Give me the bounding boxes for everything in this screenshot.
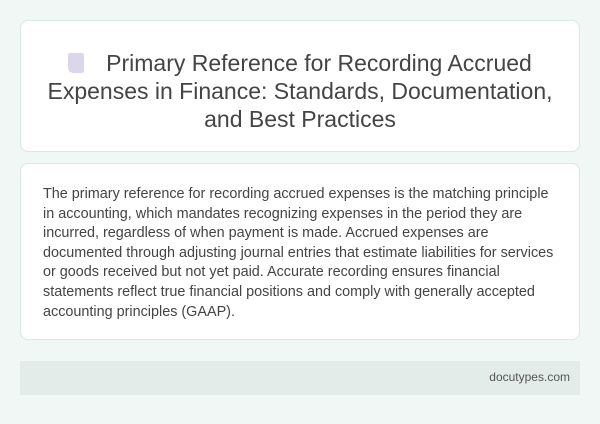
paragraph: in accounting, which mandates recognizing expenses in the period they are <box>43 206 522 222</box>
footer bar <box>20 361 580 395</box>
header panel <box>20 20 580 152</box>
icon: receipt <box>68 53 84 73</box>
paragraph: documented through adjusting journal entries that estimate liabilities for services <box>43 245 553 261</box>
body text panel <box>20 163 580 340</box>
footer text: docutypes.com <box>489 370 570 384</box>
paragraph: accounting principles (GAAP). <box>43 304 235 320</box>
title: Primary Reference for Recording Accrued Expenses in Finance: Standards, Documentation, and Best Practices <box>47 50 552 132</box>
paragraph: The primary reference for recording accrued expenses is the matching principle <box>43 186 549 202</box>
paragraph <box>43 186 553 320</box>
paragraph: or goods received but not yet paid. Accurate recording ensures financial <box>43 264 500 280</box>
paragraph: incurred, regardless of when payment is made. Accrued expenses are <box>43 225 489 241</box>
paragraph: statements reflect true financial positions and comply with generally accepted <box>43 284 535 300</box>
